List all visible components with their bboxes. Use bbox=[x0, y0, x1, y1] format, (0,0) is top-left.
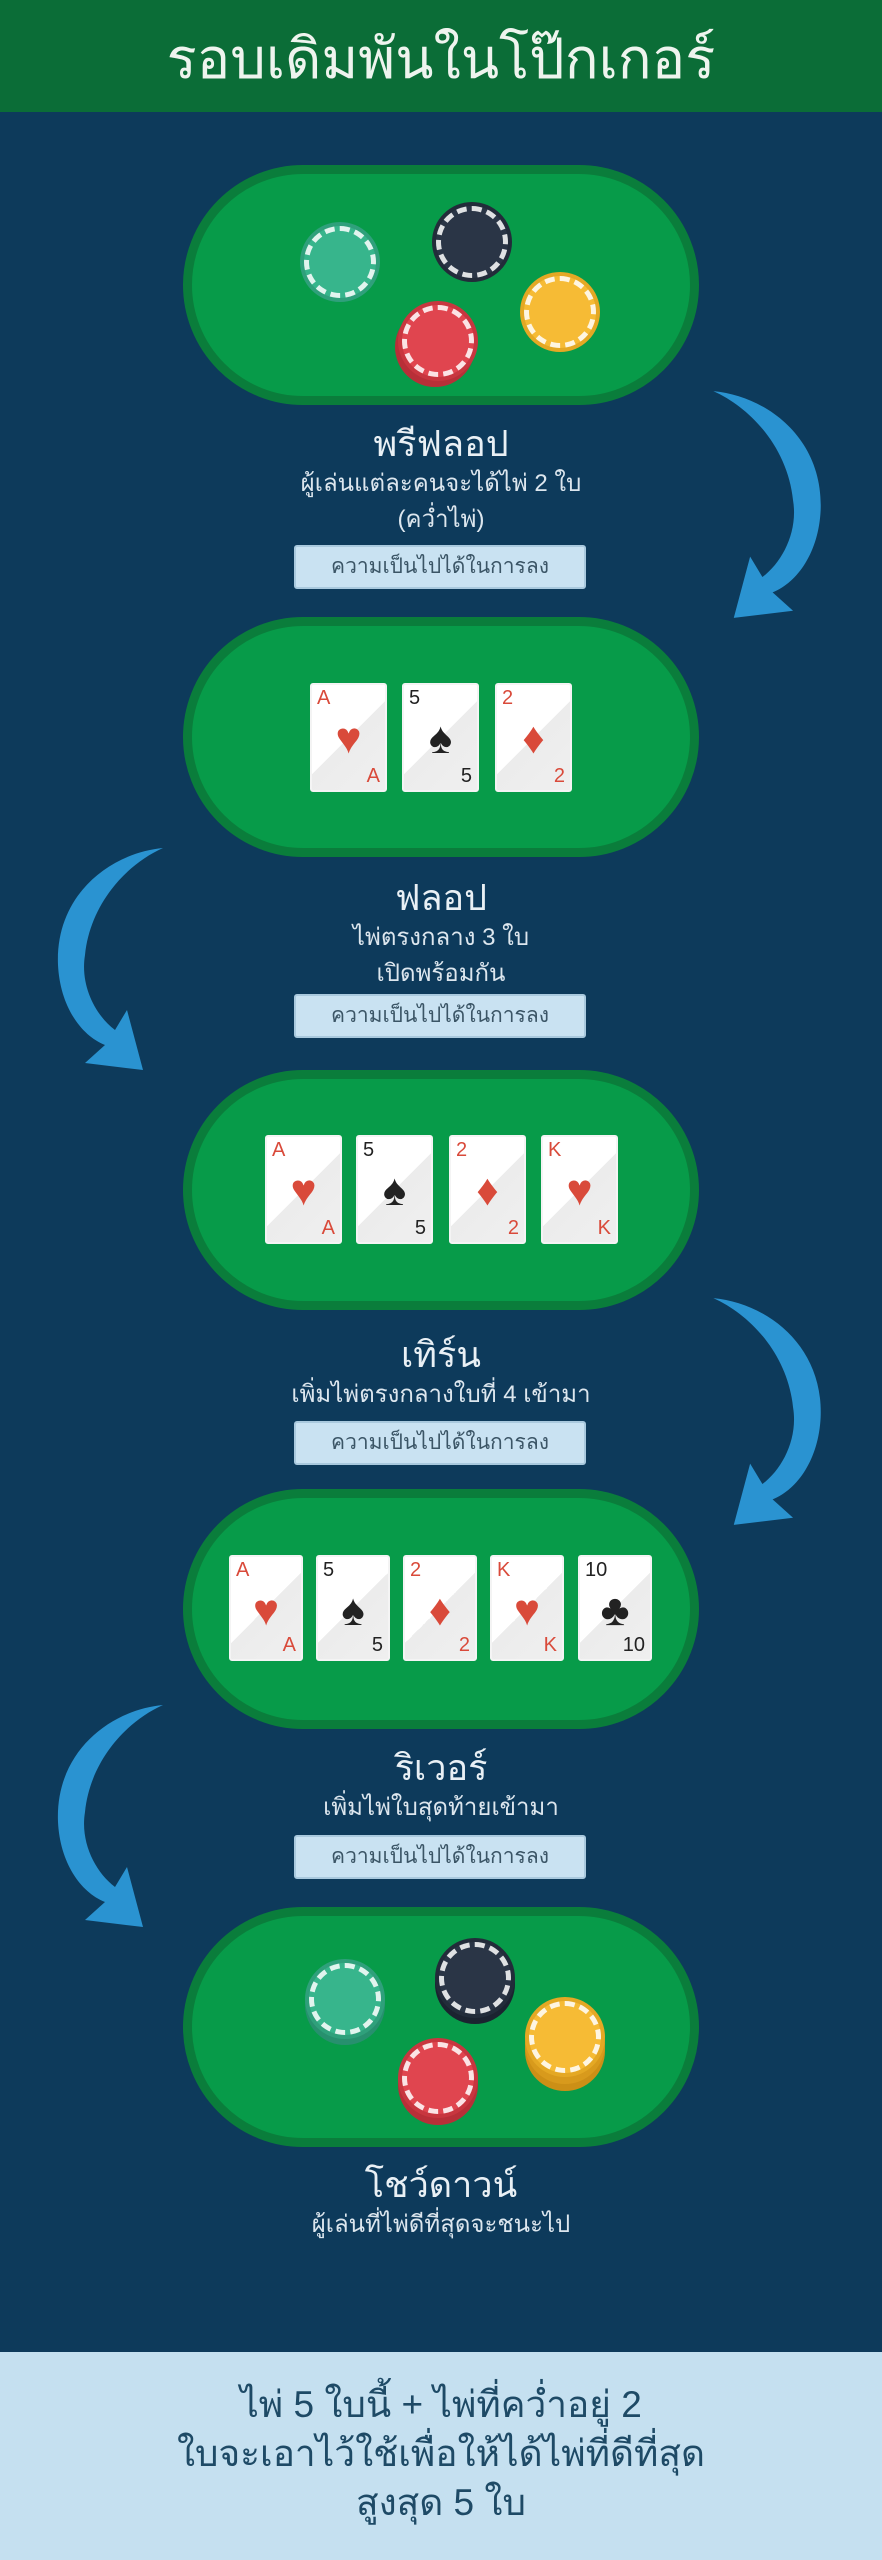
table 2: 2 cards: 2 bbox=[554, 765, 565, 787]
table 2: 2 cards: A bbox=[317, 687, 330, 709]
label 3: เพิ่มไพ่ตรงกลางใบที่ 4 เข้ามา bbox=[291, 1381, 591, 1408]
arrow 1 right bbox=[714, 391, 821, 618]
table 2: 2 cards: ♥ bbox=[335, 714, 362, 763]
table 3: 4 cards: K bbox=[548, 1139, 561, 1161]
footer note: ไพ่ 5 ใบนี้ + ไพ่ที่คว่ำอยู่ 2 bbox=[240, 2384, 642, 2425]
table 4: 5 cards: ♥ bbox=[514, 1586, 540, 1635]
chip teal stack bbox=[309, 1963, 381, 2035]
table 2: 2 cards: ♦ bbox=[522, 714, 545, 763]
table 4: 5 cards: ♥ bbox=[253, 1586, 279, 1635]
table 3: 4 cards: ♥ bbox=[290, 1166, 317, 1215]
table 2: 2 cards: 2 bbox=[502, 687, 513, 709]
label 5: โชว์ดาวน์ bbox=[365, 2164, 517, 2205]
button 3: ความเป็นไปได้ในการลง bbox=[331, 1431, 549, 1454]
table 4: 5 cards: 2 bbox=[459, 1634, 470, 1656]
chip red bbox=[402, 305, 474, 377]
button 4: ความเป็นไปได้ในการลง bbox=[331, 1845, 549, 1868]
table 4: 5 cards: ♦ bbox=[429, 1586, 451, 1635]
button 2: ความเป็นไปได้ในการลง bbox=[331, 1004, 549, 1027]
table 4: 5 cards: 10 bbox=[623, 1634, 645, 1656]
table 4: 5 cards: 10 bbox=[585, 1559, 607, 1581]
table 3: 4 cards: 2 bbox=[456, 1139, 467, 1161]
label 5 bbox=[312, 2164, 570, 2238]
arrow 2 left bbox=[58, 848, 163, 1070]
chip red stack bbox=[402, 2042, 474, 2114]
footer note: สูงสุด 5 ใบ bbox=[356, 2482, 526, 2523]
chip yellow stack bbox=[529, 2001, 601, 2073]
table 4: 5 cards: 5 bbox=[323, 1559, 334, 1581]
label 4: ริเวอร์ bbox=[395, 1747, 487, 1788]
table 1: chips bbox=[183, 165, 699, 405]
label 1: (คว่ำไพ่) bbox=[398, 506, 484, 533]
table 4: 5 cards: K bbox=[497, 1559, 510, 1581]
table 2: 2 cards: 5 bbox=[461, 765, 472, 787]
footer note: ใบจะเอาไว้ใช้เพื่อให้ได้ไพ่ที่ดีที่สุด bbox=[177, 2433, 705, 2474]
label 4: เพิ่มไพ่ใบสุดท้ายเข้ามา bbox=[323, 1794, 559, 1821]
chip navy bbox=[436, 206, 508, 278]
table 3: 4 cards: 5 bbox=[415, 1217, 426, 1239]
label 5: ผู้เล่นที่ไพ่ดีที่สุดจะชนะไป bbox=[312, 2211, 570, 2238]
table 3: 4 cards bbox=[183, 1070, 699, 1310]
table 3: 4 cards: ♠ bbox=[383, 1166, 406, 1215]
label 2 bbox=[351, 877, 529, 987]
table 2: 2 cards bbox=[183, 617, 699, 857]
table 3: 4 cards: K bbox=[598, 1217, 611, 1239]
button 3 bbox=[294, 1421, 586, 1465]
table 4: 5 cards: A bbox=[283, 1634, 296, 1656]
label 3 bbox=[291, 1334, 591, 1408]
label 1: พรีฟลอป bbox=[373, 423, 509, 464]
table 4: 5 cards: ♣ bbox=[601, 1586, 629, 1635]
arrow 4 left bbox=[58, 1705, 163, 1927]
table 4: 5 cards: A bbox=[236, 1559, 249, 1581]
table 3: 4 cards: A bbox=[322, 1217, 335, 1239]
table 5: chip stacks bbox=[183, 1907, 699, 2147]
table 2: 2 cards: A bbox=[367, 765, 380, 787]
table 4: 5 cards: K bbox=[544, 1634, 557, 1656]
table 2: 2 cards: 5 bbox=[409, 687, 420, 709]
label 2: ฟลอป bbox=[395, 877, 487, 918]
table 3: 4 cards: 5 bbox=[363, 1139, 374, 1161]
table 3: 4 cards: 2 bbox=[508, 1217, 519, 1239]
table 3: 4 cards: ♥ bbox=[566, 1166, 593, 1215]
button 1: ความเป็นไปได้ในการลง bbox=[331, 555, 549, 578]
label 3: เทิร์น bbox=[401, 1334, 481, 1375]
button 2 bbox=[294, 994, 586, 1038]
table 2: 2 cards: ♠ bbox=[429, 714, 452, 763]
footer note bbox=[0, 2352, 882, 2560]
label 1 bbox=[301, 423, 581, 533]
table 4: 5 cards: ♠ bbox=[341, 1586, 365, 1635]
button 1 bbox=[294, 545, 586, 589]
table 3: 4 cards: ♦ bbox=[476, 1166, 499, 1215]
chip yellow bbox=[524, 276, 596, 348]
label 2: เปิดพร้อมกัน bbox=[377, 960, 505, 987]
table 3: 4 cards: A bbox=[272, 1139, 285, 1161]
button 4 bbox=[294, 1835, 586, 1879]
chip teal bbox=[304, 226, 376, 298]
label 1: ผู้เล่นแต่ละคนจะได้ไพ่ 2 ใบ bbox=[301, 470, 581, 497]
label 4 bbox=[323, 1747, 559, 1822]
table 4: 5 cards bbox=[183, 1489, 699, 1729]
table 4: 5 cards: 2 bbox=[410, 1559, 421, 1581]
chip navy stack bbox=[439, 1942, 511, 2014]
table 4: 5 cards: 5 bbox=[372, 1634, 383, 1656]
arrow 3 right bbox=[714, 1298, 821, 1525]
title header: รอบเดิมพันในโป๊กเกอร์ bbox=[167, 27, 715, 90]
label 2: ไพ่ตรงกลาง 3 ใบ bbox=[353, 924, 529, 951]
title header bbox=[0, 0, 882, 112]
